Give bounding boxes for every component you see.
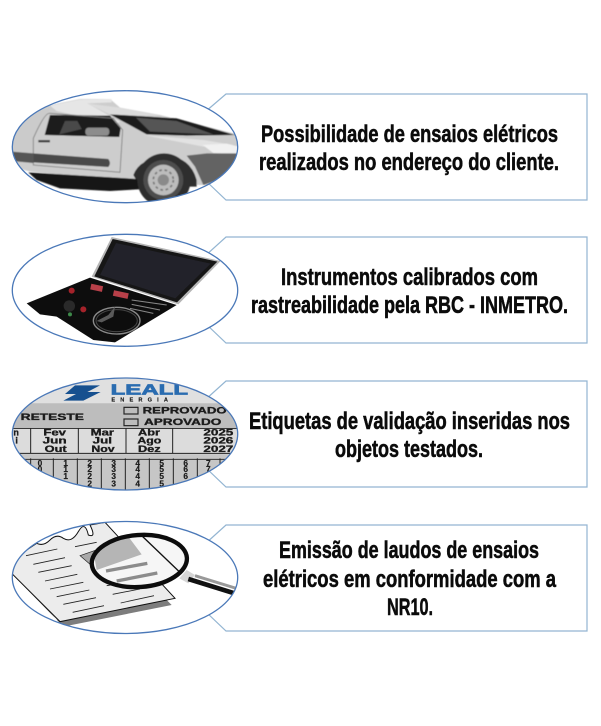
icon: validation sticker: 7 (206, 458, 211, 468)
panel: inspection reports (7, 521, 587, 634)
icon: validation sticker: i (15, 435, 18, 445)
text: calibrated instruments (251, 264, 568, 319)
text: validation labels (249, 408, 570, 463)
icon: validation sticker: 2025 (203, 428, 233, 438)
icon: validation sticker: Ago (137, 435, 162, 445)
icon: validation sticker: 5 (159, 458, 164, 468)
text: mobile testing (259, 121, 559, 176)
icon: validation sticker (10, 377, 243, 491)
icon: validation sticker: LEALL (111, 383, 188, 399)
icon: validation sticker: 2 (87, 478, 92, 488)
icon: validation sticker: 4 (135, 458, 140, 468)
icon: validation sticker: APROVADO (144, 417, 221, 427)
icon: validation sticker: 7 (206, 464, 211, 474)
icon: validation sticker: Abr (138, 428, 161, 438)
icon: validation sticker: 4 (135, 478, 140, 488)
icon: validation sticker: Jun (43, 435, 67, 445)
callout box: validation labels (205, 381, 587, 487)
icon: validation sticker: 3 (111, 464, 116, 474)
icon: validation sticker: Jul (93, 435, 112, 445)
icon: validation sticker: 3 (111, 478, 116, 488)
icon: validation sticker: 2026 (203, 435, 233, 445)
icon: validation sticker: Nov (91, 444, 115, 454)
icon: validation sticker: 5 (159, 464, 164, 474)
icon: document and magnifier (13, 523, 236, 626)
icon: validation sticker: 2 (87, 464, 92, 474)
icon: validation sticker: 5 (159, 478, 164, 488)
panel: mobile testing (7, 91, 587, 207)
icon: validation sticker: RETESTE (21, 412, 84, 422)
icon: validation sticker: REPROVADO (143, 405, 227, 415)
icon: validation sticker: 4 (135, 464, 140, 474)
icon: validation sticker: 2027 (203, 444, 233, 454)
panel: validation labels (10, 377, 587, 491)
icon: instrument case (12, 234, 238, 346)
ellipse outline (12, 91, 238, 203)
icon: validation sticker: Out (45, 444, 67, 454)
icon: validation sticker: 1 (63, 471, 68, 481)
ellipse outline (12, 522, 238, 634)
icon: validation sticker: 3 (111, 458, 116, 468)
icon: validation sticker: Dez (138, 444, 161, 454)
icon: validation sticker: Fev (43, 428, 66, 438)
icon: validation sticker: 1 (63, 458, 68, 468)
text: inspection reports (263, 537, 556, 621)
icon: validation sticker: 6 (183, 464, 188, 474)
text: inspection reports: NR10. (387, 594, 433, 621)
callout box: mobile testing (205, 94, 587, 200)
icon: validation sticker: 1 (63, 464, 68, 474)
ellipse outline (12, 378, 238, 490)
icon: validation sticker: 5 (159, 471, 164, 481)
icon: validation sticker: 2 (87, 458, 92, 468)
icon: validation sticker: 0 (38, 464, 43, 474)
icon: validation sticker: 6 (183, 471, 188, 481)
icon: validation sticker: 4 (135, 471, 140, 481)
icon: validation sticker: ENERGIA (111, 397, 168, 403)
icon: validation sticker: Mar (91, 428, 115, 438)
icon: validation sticker: 3 (111, 471, 116, 481)
icon: silver car (13, 98, 237, 201)
callout box: inspection reports (205, 525, 587, 631)
icon: validation sticker: n (13, 428, 19, 438)
icon: validation sticker: 6 (183, 458, 188, 468)
icon: validation sticker: 0 (38, 458, 43, 468)
icon: validation sticker: 2 (87, 471, 92, 481)
text: validation labels: objetos testados. (335, 436, 483, 463)
callout box: calibrated instruments (205, 237, 587, 343)
ellipse outline (12, 234, 238, 346)
panel: calibrated instruments (12, 234, 587, 346)
